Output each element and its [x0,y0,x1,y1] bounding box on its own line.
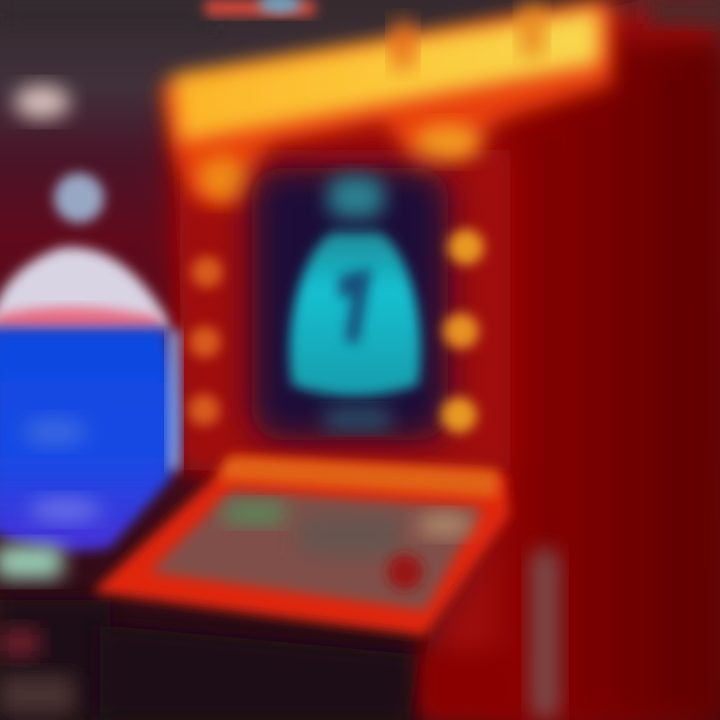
globe lamp top [54,173,104,223]
marquee sign [160,0,612,205]
base stripes [0,545,75,715]
dome [0,247,170,332]
cabinet side stripes [545,80,673,700]
console: control panel [150,490,482,610]
lights: left column [188,256,223,426]
console: red frame [92,456,510,636]
ceiling light [14,85,70,119]
machine body: red cabinet [170,0,720,720]
screen panel: dark navy [252,168,448,440]
icon: teal bottle [290,176,421,430]
handle [530,548,560,720]
lights: right column [441,229,484,433]
machine base: dark lower cabinet [100,625,520,720]
blue panel [0,328,180,551]
